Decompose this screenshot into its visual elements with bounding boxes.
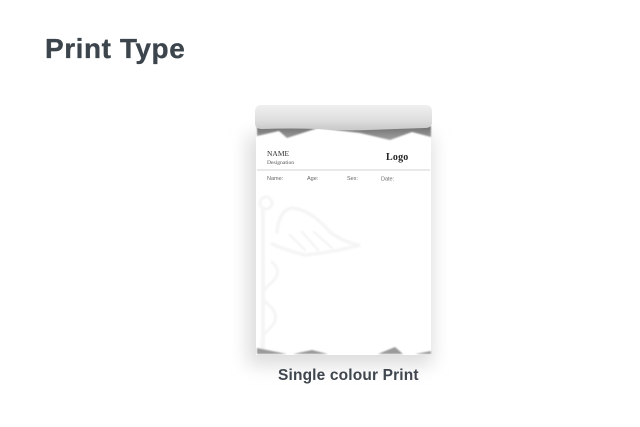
form fields: Date: bbox=[381, 176, 395, 182]
watermark: caduceus bbox=[260, 197, 360, 350]
form fields bbox=[267, 176, 395, 182]
logo: Logo bbox=[386, 152, 408, 163]
binding roll bbox=[255, 105, 432, 130]
title: Print Type bbox=[45, 33, 185, 64]
name: NAME bbox=[267, 149, 290, 158]
form fields: Name: bbox=[267, 176, 284, 182]
paper shadow bbox=[248, 135, 432, 365]
form fields: Age: bbox=[307, 176, 319, 182]
designation: Designation bbox=[267, 160, 294, 166]
header band bbox=[257, 126, 431, 140]
caption: Single colour Print bbox=[278, 367, 419, 384]
footer band bbox=[257, 347, 431, 354]
paper sheet bbox=[256, 126, 431, 355]
form fields: Sex: bbox=[347, 176, 358, 182]
